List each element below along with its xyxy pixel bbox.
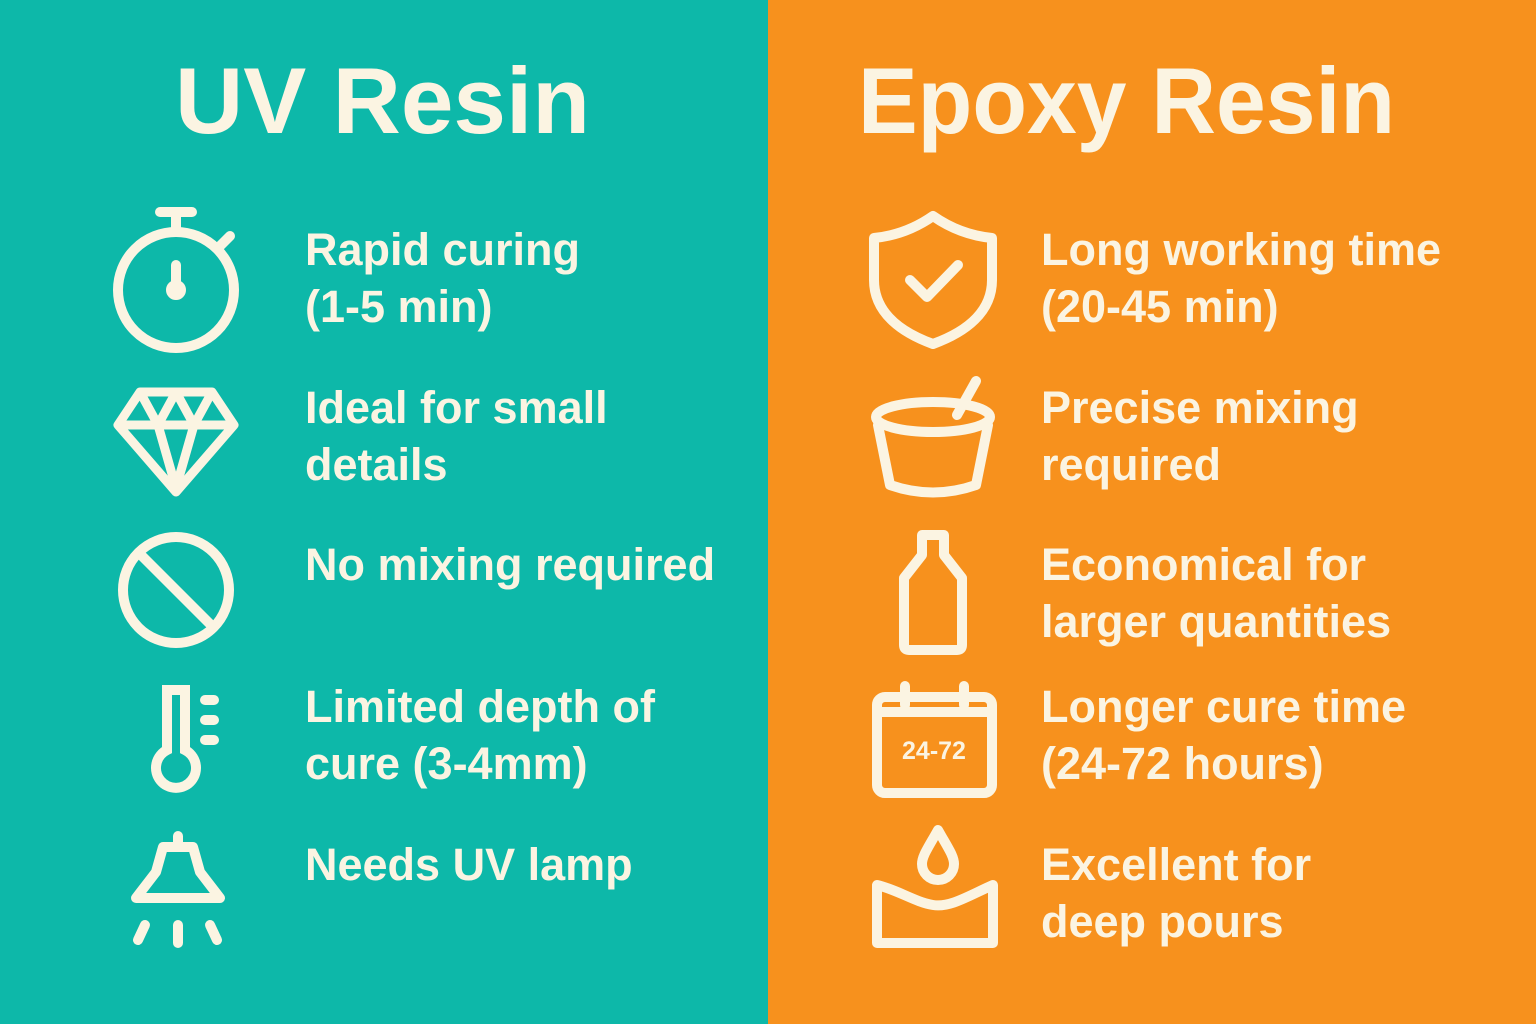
title: UV Resin: UV Resin xyxy=(175,48,590,153)
text: precise mixing: Precise mixing xyxy=(1041,382,1359,433)
panel: epoxy resin xyxy=(768,0,1536,1024)
panel: UV resin xyxy=(0,0,768,1024)
icon: no symbol xyxy=(123,537,229,643)
icon: mixing cup xyxy=(876,381,990,492)
text: ideal for small details: Ideal for small xyxy=(305,382,608,433)
text: limited depth: cure (3-4mm) xyxy=(305,738,588,789)
text: longer cure time: (24-72 hours) xyxy=(1041,738,1324,789)
text: rapid curing: Rapid curing xyxy=(305,224,580,275)
text: deep pours: deep pours xyxy=(1041,896,1284,947)
text: long working time: (20-45 min) xyxy=(1041,281,1279,332)
text: ideal for small details: details xyxy=(305,439,448,490)
icon: thermometer xyxy=(156,690,214,788)
text: economical: Economical for xyxy=(1041,539,1366,590)
icon: bottle xyxy=(904,535,962,650)
icon: deep pour xyxy=(877,830,993,943)
text: precise mixing: required xyxy=(1041,439,1221,490)
title: Epoxy Resin: Epoxy Resin xyxy=(858,48,1395,153)
text: deep pours: Excellent for xyxy=(1041,839,1311,890)
icon: shield check xyxy=(874,216,992,344)
icon: calendar: 24-72 xyxy=(902,737,966,765)
text: limited depth: Limited depth of xyxy=(305,681,656,732)
text: no mixing: No mixing required xyxy=(305,539,715,590)
text: economical: larger quantities xyxy=(1041,596,1391,647)
icon: UV lamp xyxy=(136,836,220,943)
icon: calendar xyxy=(877,686,992,793)
icon: stopwatch xyxy=(118,212,234,348)
text: needs UV lamp: Needs UV lamp xyxy=(305,839,633,890)
text: rapid curing: (1-5 min) xyxy=(305,281,493,332)
text: long working time: Long working time xyxy=(1041,224,1441,275)
icon: diamond xyxy=(118,392,234,492)
text: longer cure time: Longer cure time xyxy=(1041,681,1406,732)
